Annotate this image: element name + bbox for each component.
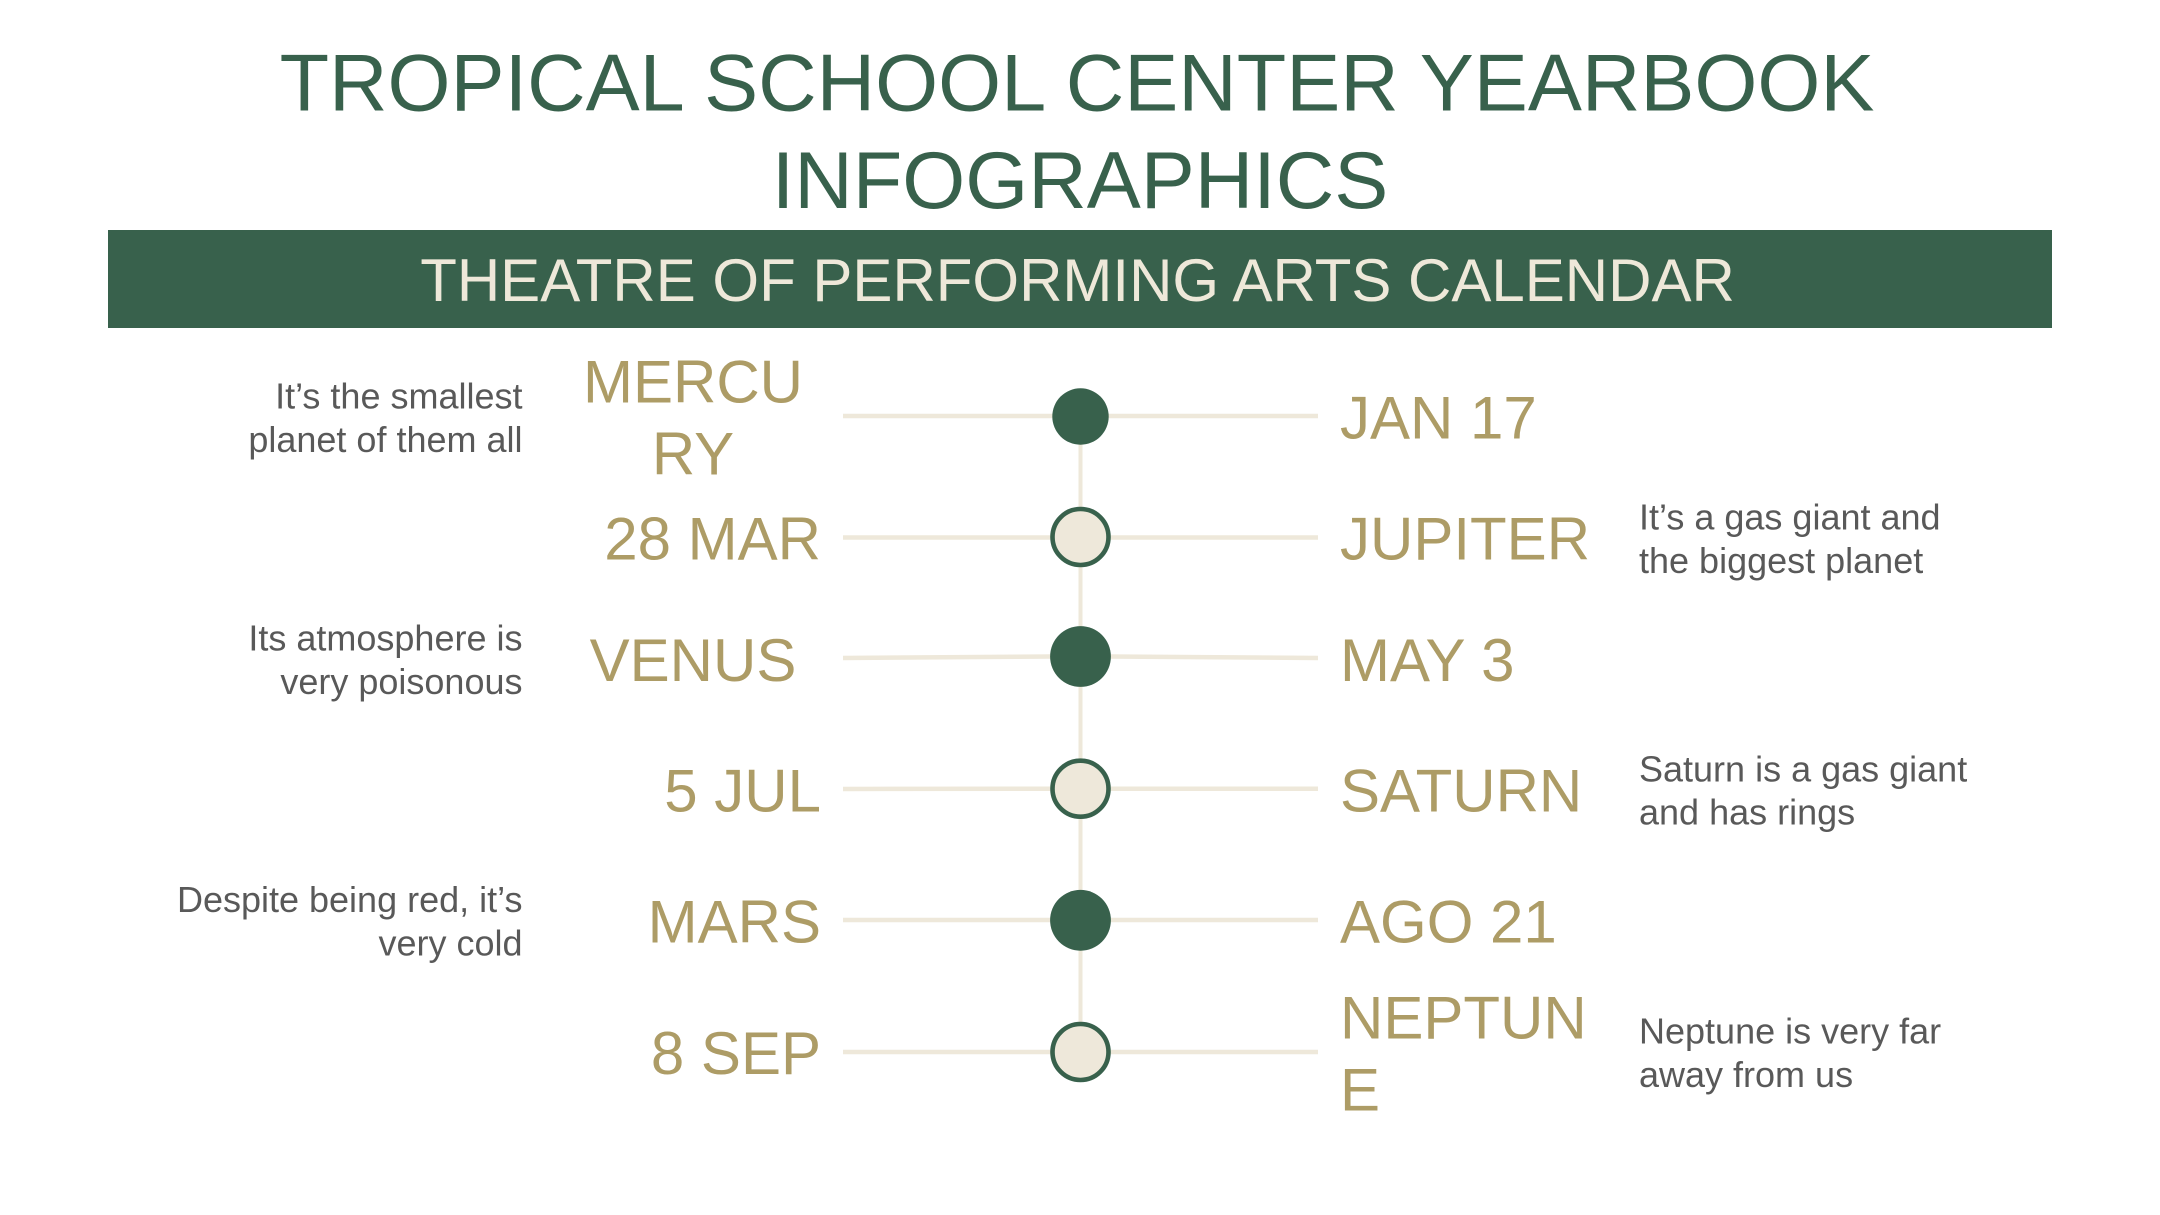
title: INFOGRAPHICS bbox=[772, 136, 1388, 226]
row 6 right label: E bbox=[1340, 1056, 1380, 1124]
row 4 right label: SATURN bbox=[1340, 758, 1582, 824]
row 5 description bbox=[177, 879, 522, 964]
row 5 description: Despite being red, it’s bbox=[177, 879, 522, 920]
row 6 right label bbox=[1340, 984, 1587, 1124]
row 2 date: 28 MAR bbox=[604, 506, 821, 572]
row 1 left label bbox=[583, 348, 803, 488]
title: TROPICAL SCHOOL CENTER YEARBOOK bbox=[280, 38, 1874, 128]
row 6 date: 8 SEP bbox=[651, 1020, 821, 1087]
node: Venus bbox=[1050, 626, 1111, 687]
row 6 right label: NEPTUN bbox=[1340, 984, 1587, 1052]
row 6 description: Neptune is very far bbox=[1639, 1010, 1941, 1052]
row 3 left label: VENUS bbox=[590, 627, 796, 694]
node: Mars bbox=[1050, 890, 1111, 951]
node: Jupiter bbox=[1052, 509, 1108, 565]
row 5 description: very cold bbox=[378, 922, 522, 964]
row 1 date: JAN 17 bbox=[1340, 384, 1537, 452]
row 6 description: away from us bbox=[1639, 1054, 1853, 1095]
row 4 description: Saturn is a gas giant bbox=[1639, 748, 1967, 790]
row 4 description bbox=[1639, 748, 1967, 832]
row 2 description: the biggest planet bbox=[1639, 540, 1923, 581]
row 1 description: planet of them all bbox=[248, 419, 522, 460]
title bbox=[280, 38, 1874, 226]
row 1 description bbox=[248, 376, 522, 460]
banner bbox=[108, 230, 2052, 328]
row 6 description bbox=[1639, 1010, 1941, 1095]
row 5 date: AGO 21 bbox=[1340, 888, 1557, 956]
row 1 left label: RY bbox=[652, 420, 734, 488]
node: Neptune bbox=[1052, 1024, 1108, 1080]
node: Saturn bbox=[1052, 761, 1108, 817]
row 3 date: MAY 3 bbox=[1340, 627, 1515, 694]
row 4 description: and has rings bbox=[1639, 792, 1855, 832]
row 2 right label: JUPITER bbox=[1340, 506, 1590, 572]
row 5 left label: MARS bbox=[648, 888, 821, 956]
row 2 description: It’s a gas giant and bbox=[1639, 496, 1941, 538]
row 1 left label: MERCU bbox=[583, 348, 803, 416]
timeline connectors bbox=[843, 416, 1318, 1052]
row 4 date: 5 JUL bbox=[664, 758, 821, 824]
row 3 description: Its atmosphere is bbox=[248, 618, 522, 658]
row 3 description: very poisonous bbox=[280, 661, 522, 702]
banner heading: THEATRE OF PERFORMING ARTS CALENDAR bbox=[420, 247, 1735, 314]
node: Mercury bbox=[1052, 388, 1109, 445]
row 2 description bbox=[1639, 496, 1941, 581]
row 1 description: It’s the smallest bbox=[275, 376, 522, 416]
row 3 description bbox=[248, 618, 522, 702]
